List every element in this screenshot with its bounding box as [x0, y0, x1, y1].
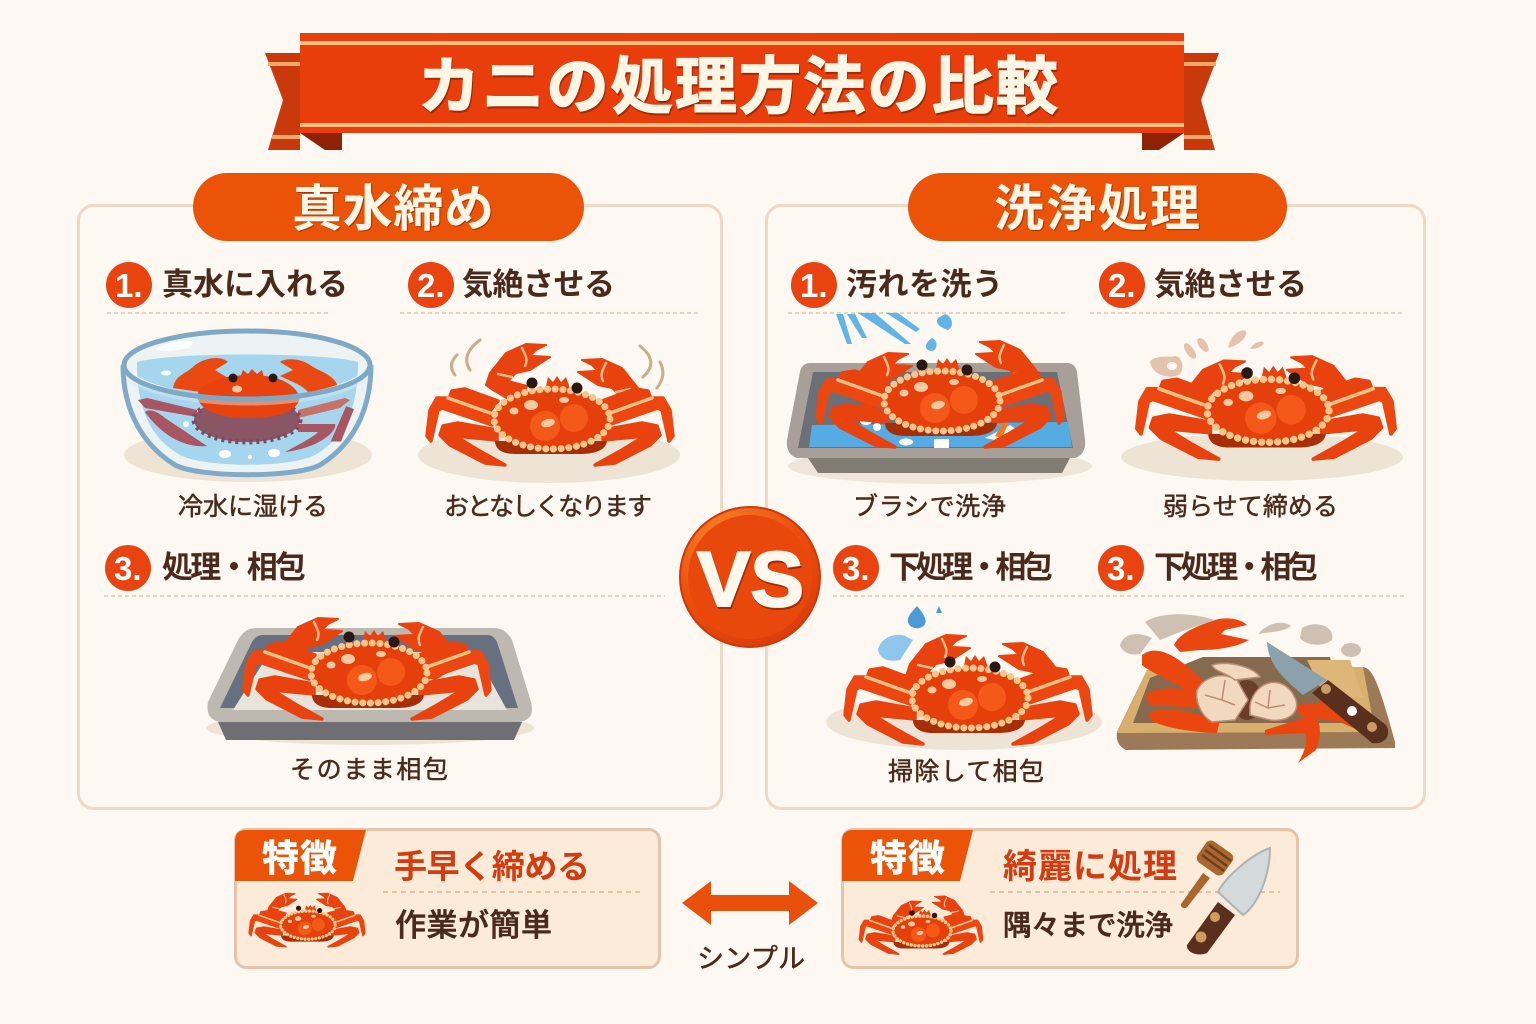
step 1 heading: 1. — [115, 267, 143, 304]
illustration: crab washed in tray — [787, 313, 1092, 484]
icon: knife — [1187, 848, 1270, 954]
step 1 heading — [791, 262, 1003, 308]
step 3 heading (left): 3. — [842, 550, 870, 587]
step 3 heading (right) — [1098, 545, 1318, 591]
step 2 heading: 2. — [1108, 267, 1136, 304]
step 3 heading (right): 下処理・相包 — [1154, 550, 1318, 585]
illustration: stunned crab — [418, 340, 680, 483]
double arrow — [682, 881, 818, 925]
water spray — [836, 313, 952, 351]
text: 手早く締める: 手早く締める — [394, 848, 590, 885]
text: 隅々まで洗浄: 隅々まで洗浄 — [1003, 910, 1173, 942]
label: シンプル: シンプル — [697, 944, 805, 974]
tag: 特徴: 特徴 — [870, 838, 945, 879]
VS badge: VS — [697, 535, 804, 623]
tag: 特徴 — [842, 830, 973, 881]
text: 作業が簡単: 作業が簡単 — [395, 908, 552, 943]
step 1 heading: 1. — [800, 267, 828, 304]
heading pill: 洗浄処理: 洗浄処理 — [994, 181, 1200, 237]
caption: おとなしくなります: おとなしくなります — [444, 493, 652, 521]
caption: ブラシで洗浄: ブラシで洗浄 — [853, 493, 1006, 521]
icon: brush — [1181, 838, 1236, 908]
tag: 特徴: 特徴 — [262, 838, 337, 879]
caption: 冷水に湿ける: 冷水に湿ける — [178, 493, 328, 521]
title banner — [265, 33, 1219, 150]
step 2 heading: 2. — [417, 267, 445, 304]
heading pill: 真水締め — [193, 173, 584, 241]
step 3 heading — [105, 545, 306, 591]
VS badge — [680, 507, 820, 647]
caption: そのまま相包: そのまま相包 — [290, 756, 448, 784]
illustration: crab on tray — [206, 618, 534, 745]
step 2 heading: 気絶させる — [462, 267, 615, 302]
step 1 heading — [106, 262, 348, 308]
text: 綺麗に処理: 綺麗に処理 — [1003, 848, 1177, 886]
step 3 heading: 3. — [114, 550, 142, 587]
icon: crab — [249, 893, 365, 947]
illustration: weakened crab — [1121, 330, 1403, 481]
panel: 真水締め — [78, 173, 722, 808]
step 3 heading (left) — [833, 545, 1053, 591]
illustration: cleaned crab — [826, 606, 1102, 750]
heading pill: 真水締め: 真水締め — [292, 181, 494, 237]
panel: 洗浄処理 — [766, 173, 1424, 808]
icon: crab — [860, 896, 982, 954]
step 2 heading — [408, 262, 615, 308]
title text: カニの処理方法の比較 — [418, 53, 1058, 122]
illustration: crab in glass bowl — [123, 331, 372, 482]
heading pill: 洗浄処理 — [908, 173, 1287, 241]
caption: 弱らせて締める: 弱らせて締める — [1163, 493, 1338, 521]
feature box: 洗浄処理 — [842, 830, 1298, 968]
step 2 heading: 気絶させる — [1154, 267, 1307, 302]
step 3 heading: 処理・相包 — [162, 550, 306, 585]
caption: 掃除して相包: 掃除して相包 — [888, 758, 1044, 786]
tag: 特徴 — [235, 830, 366, 881]
step 3 heading (left): 下処理・相包 — [889, 550, 1053, 585]
step 1 heading: 真水に入れる — [162, 267, 348, 302]
step 3 heading (right): 3. — [1107, 550, 1135, 587]
illustration: crab cut on board with knife — [1117, 614, 1395, 763]
feature box: 真水締め — [235, 830, 660, 968]
step 1 heading: 汚れを洗う — [846, 267, 1003, 302]
step 2 heading — [1099, 262, 1307, 308]
